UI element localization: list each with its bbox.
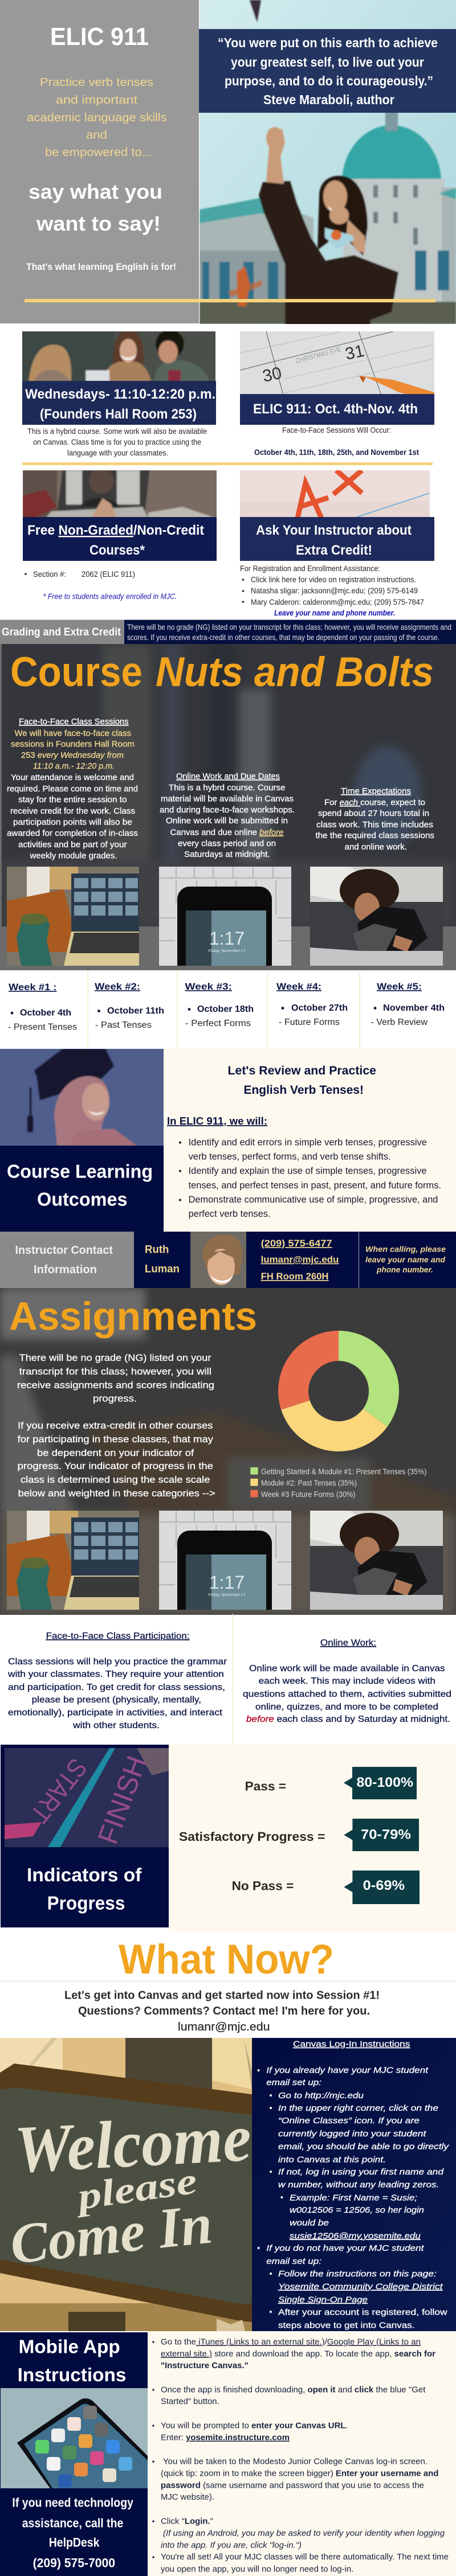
- column: face-to-face class sessions: participation points will also be: [13, 818, 132, 827]
- column: face-to-face class sessions: activities and be part of your: [18, 840, 127, 850]
- list: outcomes: [179, 1137, 441, 1219]
- text block: section number: Section #:: [33, 569, 66, 579]
- column: time expectations: For each course, expect to: [324, 798, 425, 807]
- photo: calendar and marker: CHRISTMAS EVE: [295, 345, 342, 365]
- text block: registration assistance: For Registration and Enrollment Assistance:: [240, 564, 380, 573]
- column: online work and due dates: and during face-to-face workshops.: [160, 805, 295, 815]
- column: online work: Online Work:: [320, 1638, 376, 1648]
- text block: face-to-face dates: [254, 425, 419, 457]
- text block: practice verb tenses: and important: [56, 94, 138, 106]
- panel: indicators of progress: [1, 1745, 456, 1931]
- text block: technology assistance: assistance, call the: [22, 2516, 123, 2530]
- title: ELIC 911: [50, 23, 149, 51]
- heading: indicators of progress: [27, 1864, 142, 1914]
- photo: red A+ grade: [240, 470, 430, 517]
- list: log-in steps: If you do not have your MJC student: [266, 2243, 424, 2253]
- chart legend: Module #2: Past Tenses (35%): [261, 1478, 357, 1487]
- list: log-in steps: currently logged into your student: [278, 2129, 426, 2139]
- column: online work: each week. This may include videos with: [259, 1676, 435, 1686]
- photo: phone on keyboard: [159, 1511, 291, 1610]
- photo: phone on keyboard: Friday, November 17: [209, 1593, 246, 1597]
- text block: technology assistance: [12, 2495, 134, 2570]
- list: mobile app steps: Enter: yosemite.instructure.com: [161, 2433, 290, 2443]
- panel: free non-graded courses: [23, 469, 217, 601]
- photo: start finish line on asphalt: START: [25, 1753, 93, 1829]
- list: mobile app steps: you open the app, you will no longer need to log-in.: [161, 2565, 353, 2574]
- list: mobile app steps: You will be prompted to enter your Canvas URL.: [161, 2421, 348, 2430]
- title: Assignments: [9, 1294, 257, 1339]
- list: log-in steps: [258, 2066, 450, 2330]
- list: mobile app steps: Started" button.: [161, 2397, 219, 2406]
- photo: phone on keyboard: Friday, November 17: [209, 949, 246, 953]
- list: outcomes: tenses, and perfect tenses in past, present, and future forms.: [189, 1180, 441, 1191]
- column: online work: [243, 1638, 451, 1724]
- photo: phone on keyboard: 1:17: [209, 928, 245, 949]
- text block: registration assistance: Natasha sligar: jacksonn@mjc.edu; (209) 575-6149: [251, 586, 418, 595]
- row: no pass: [232, 1871, 420, 1904]
- panel: participation and online work: [0, 1614, 456, 1747]
- column: face-to-face class participation: with other students.: [72, 1721, 160, 1730]
- photo: graduate in front of domed building: [199, 0, 456, 324]
- heading: review and practice: Let's Review and Practice: [228, 1064, 376, 1077]
- text block: registration assistance: Click link here for video on registration instructions.: [251, 575, 416, 584]
- week 2: [95, 981, 164, 1030]
- chart legend: Getting Started & Module #1: Present Tenses (35%): [261, 1467, 426, 1476]
- list: log-in steps: Single Sign-On Page: [278, 2295, 368, 2305]
- text block: contact: Questions? Comments? Contact me! I'm here for you.: [78, 2005, 370, 2017]
- list: outcomes: Identify and explain the use of simple tenses, progressive: [189, 1165, 426, 1176]
- text block: section number: 2062 (ELIC 911): [82, 569, 135, 579]
- column: face-to-face class sessions: We will have face-to-face class: [15, 729, 131, 738]
- background photo: bolts: [2, 644, 456, 926]
- column: online work and due dates: Online Work and Due Dates: [176, 772, 280, 781]
- text block: section number: [25, 569, 177, 601]
- panel: extra credit: [240, 470, 434, 617]
- heading: extra credit: Ask Your Instructor about: [256, 523, 412, 538]
- week 2: Week #2:: [95, 981, 140, 992]
- column: online work: Online work will be made available in Canvas: [249, 1664, 445, 1673]
- text block: grade explanation: be dependent on your indicator of: [37, 1447, 194, 1458]
- list: mobile app steps: Click "Login.": [161, 2516, 213, 2526]
- row: satisfactory progress: Satisfactory Progress =: [179, 1830, 325, 1844]
- title: Nuts and Bolts: [156, 649, 434, 695]
- list: log-in steps: w number, without any leading zeros.: [278, 2180, 439, 2189]
- list: log-in steps: email, you should be able to go directly: [278, 2142, 450, 2151]
- column: online work and due dates: material will be available in Canvas: [161, 794, 294, 804]
- contact details: FH Room 260H: [261, 1271, 328, 1282]
- banner: grading and extra credit: [0, 620, 456, 644]
- photo: phone on keyboard: [159, 867, 291, 966]
- list: log-in steps: If you already have your MJC student: [266, 2066, 429, 2075]
- list: log-in steps: susie12506@my.yosemite.edu: [290, 2231, 421, 2241]
- list: mobile app steps: Once the app is finished downloading, open it and click the blue "Get: [161, 2385, 426, 2394]
- note: when calling: leave your name and: [365, 1255, 445, 1264]
- text block: practice verb tenses: academic language skills: [27, 112, 167, 124]
- contact details: [261, 1238, 339, 1282]
- list: log-in steps: steps above to get into Canvas.: [278, 2320, 415, 2330]
- panel: assignments: [0, 1288, 456, 1622]
- photo: phone on keyboard: 1:17: [209, 1572, 245, 1593]
- week 3: Week #3:: [185, 981, 232, 992]
- column: online work and due dates: every class period and on: [178, 839, 276, 848]
- week 3: - Perfect Forms: [185, 1019, 251, 1028]
- week 4: Week #4:: [276, 981, 321, 992]
- week 5: Week #5:: [377, 981, 422, 992]
- heading: class time: (Founders Hall Room 253): [40, 407, 197, 422]
- photo: welcome please come in chalkboard: [0, 2038, 253, 2331]
- list: mobile app steps: (If using an Android, you may be asked to verify your identity when logging: [163, 2528, 445, 2538]
- photo: video meeting on laptop with mug: [7, 867, 139, 966]
- heading: free non-graded courses: Free Non-Graded/Non-Credit: [27, 523, 204, 538]
- heading: [15, 1244, 113, 1276]
- title: What Now?: [119, 1937, 334, 1983]
- photo: video call on laptop: [23, 470, 217, 517]
- list: mobile app steps: "Instructure Canvas.": [161, 2361, 249, 2370]
- column: face-to-face class sessions: stay for the entire session to: [18, 795, 127, 805]
- photo: welcome please come in chalkboard: Come In: [7, 2192, 215, 2276]
- column: face-to-face class sessions: Your attendance is welcome and: [11, 773, 134, 782]
- title: Course: [10, 649, 142, 695]
- text block: grade explanation: There will be no grade (NG) listed on your: [19, 1352, 211, 1363]
- heading: review and practice: [228, 1064, 376, 1097]
- note: when calling: When calling, please: [365, 1245, 446, 1254]
- panel: course learning outcomes: [0, 1048, 456, 1232]
- background photo: desk and laptop: [0, 1288, 456, 1615]
- row: pass: Pass =: [245, 1779, 286, 1794]
- list: log-in steps: email set up:: [266, 2078, 321, 2087]
- heading: class time: Wednesdays- 11:10-12:20 p.m.: [25, 387, 215, 402]
- heading: say what you want to say: say what you: [28, 180, 162, 203]
- week 2: - Past Tenses: [95, 1020, 152, 1030]
- week 4: [276, 981, 348, 1027]
- panel: class time: [22, 330, 216, 457]
- list: mobile app steps: MJC website).: [161, 2492, 214, 2502]
- photo: welcome please come in chalkboard: please: [72, 2160, 199, 2218]
- week 1: October 4th: [20, 1008, 71, 1018]
- text block: contact: Let's get into Canvas and get started now into Session #1!: [64, 1989, 380, 2001]
- chart legend: [250, 1467, 426, 1499]
- column: face-to-face class sessions: 253 every Wednesday from: [21, 750, 124, 760]
- panel: quote: [199, 29, 456, 113]
- text block: hybrid course: language with your classmates.: [67, 448, 168, 457]
- column: face-to-face class participation: with your classmates. They require your attention: [7, 1670, 224, 1679]
- photo: graduate in hijab: [0, 1049, 164, 1146]
- text block: practice verb tenses: and: [86, 129, 107, 141]
- photo: video meeting on laptop with mug: [7, 1511, 139, 1610]
- heading: course learning outcomes: [7, 1161, 153, 1209]
- subheading: In ELIC 911, we will:: [167, 1115, 267, 1127]
- list: mobile app steps: into the app. If you are, click "log-in."): [161, 2540, 302, 2550]
- week 2: October 11th: [107, 1006, 164, 1016]
- column: online work: online, quizzes, and more to be completed: [255, 1703, 438, 1712]
- list: log-in steps: “Online Classes” icon. If you are: [278, 2116, 420, 2126]
- panel: quote: “You were put on this earth to achieve: [218, 35, 438, 50]
- week 5: November 4th: [383, 1003, 445, 1013]
- text block: grade explanation: for participating in these classes, that may: [18, 1434, 214, 1445]
- column: online work: questions attached to them, activities submitted: [243, 1689, 451, 1699]
- text block: practice verb tenses: [27, 76, 167, 159]
- list: log-in steps: email set up:: [266, 2257, 321, 2266]
- column: face-to-face class sessions: weekly module grades.: [30, 851, 117, 861]
- week 3: October 18th: [197, 1004, 254, 1014]
- week 4: October 27th: [291, 1003, 348, 1013]
- list: log-in steps: into Canvas at this point.: [278, 2155, 386, 2164]
- heading: Instructor Contact: [15, 1244, 113, 1257]
- photo: woman reading on sofa: [310, 1511, 443, 1610]
- column: online work and due dates: Online work will be submitted in: [166, 816, 288, 826]
- list: log-in steps: w0012506 = 12506, so her login: [290, 2205, 424, 2215]
- list: outcomes: Identify and edit errors in simple verb tenses, progressive: [189, 1137, 427, 1147]
- column: face-to-face class sessions: Face-to-Face Class Sessions: [19, 717, 129, 727]
- note: when calling: [365, 1245, 446, 1274]
- list: outcomes: Demonstrate communicative use of simple, progressive, and: [189, 1194, 438, 1205]
- column: time expectations: Time Expectations: [341, 786, 411, 796]
- text block: grade explanation: transcript for this class; however, you will: [19, 1366, 211, 1377]
- photo: woman reading on sofa: [310, 867, 443, 966]
- heading: class time: [25, 387, 215, 422]
- column: face-to-face class participation: Class sessions will help you practice the grammar: [8, 1657, 227, 1667]
- row: satisfactory progress: [179, 1819, 419, 1851]
- panel: mobile app instructions: [0, 2331, 456, 2576]
- text block: technology assistance: (209) 575-7000: [33, 2556, 115, 2570]
- text block: grade explanation: class is determined using the scale scale: [21, 1474, 210, 1485]
- text block: section number: * Free to students already enrolled in MJC.: [43, 592, 177, 601]
- heading: indicators of progress: Indicators of: [27, 1864, 142, 1885]
- column: face-to-face class participation: please be present (physically, mentally,: [32, 1695, 201, 1705]
- heading: Mobile App: [19, 2336, 120, 2357]
- text block: grade explanation: [17, 1352, 215, 1499]
- panel: what now: [0, 1931, 456, 2038]
- chart: donut of grade weights: [278, 1331, 399, 1451]
- column: online work and due dates: Saturdays at midnight.: [184, 850, 270, 859]
- chart legend: Week #3 Future Forms (30%): [261, 1490, 356, 1499]
- text block: technology assistance: If you need technology: [12, 2495, 134, 2509]
- text block: face-to-face dates: October 4th, 11th, 18th, 25th, and November 1st: [254, 448, 419, 457]
- contact details: lumanr@mjc.edu: [261, 1254, 339, 1265]
- text block: grade explanation: progress.: [93, 1393, 137, 1404]
- column: time expectations: class work. This time includes: [316, 820, 433, 830]
- column: face-to-face class participation: emotionally), participate in activities, and interact: [8, 1708, 223, 1717]
- heading: say what you want to say: want to say!: [36, 212, 161, 235]
- list: outcomes: verb tenses, perfect forms, and verb tense shifts.: [189, 1151, 391, 1162]
- list: mobile app steps: (quick tip: zoom in to make the screen bigger) Enter your username and: [161, 2469, 438, 2478]
- heading: extra credit: [256, 523, 412, 558]
- list: mobile app steps: [152, 2337, 449, 2574]
- text block: hybrid course: This is a hybrid course. Some work will also be available: [27, 426, 207, 436]
- column: face-to-face class participation: and participation. To get credit for class sessions,: [8, 1683, 225, 1692]
- column: face-to-face class sessions: required. Please come on time and: [7, 784, 138, 794]
- photo: calendar and marker: [240, 331, 434, 394]
- text block: face-to-face dates: Face-to-Face Sessions Will Occur:: [282, 425, 391, 434]
- text block: contact: lumanr@mjc.edu: [178, 2021, 270, 2033]
- row: no pass: 0-69%: [363, 1878, 405, 1893]
- heading: course learning outcomes: Outcomes: [37, 1189, 128, 1209]
- text block: grade explanation: below and weighted in these categories -->: [18, 1488, 215, 1499]
- heading: free non-graded courses: Courses*: [89, 543, 145, 558]
- heading: Canvas Log-In Instructions: [293, 2040, 410, 2049]
- column: face-to-face class sessions: sessions in Founders Hall Room: [11, 739, 135, 749]
- column: online work: before each class and by Saturday at midnight.: [246, 1714, 450, 1724]
- text block: hybrid course: [27, 426, 207, 457]
- text block: grade explanation: If you receive extra-credit in other courses: [18, 1420, 213, 1431]
- photo: instructor portrait: [190, 1232, 246, 1288]
- panel: course dates: [240, 331, 434, 457]
- panel: weekly schedule: [0, 970, 456, 1051]
- list: log-in steps: would be: [290, 2218, 329, 2228]
- column: face-to-face class participation: Face-to-Face Class Participation:: [46, 1631, 190, 1641]
- panel: hero intro: [0, 0, 199, 323]
- text block: grade explanation: receive assignments and scores indicating: [17, 1380, 214, 1390]
- panel: course nuts and bolts: [0, 644, 456, 978]
- heading: indicators of progress: Progress: [47, 1893, 125, 1914]
- instructor name: Luman: [145, 1264, 180, 1275]
- heading: Information: [34, 1264, 97, 1276]
- column: time expectations: spend about 27 hours total in: [318, 809, 429, 818]
- week 3: [185, 981, 254, 1028]
- list: mobile app steps: Go to the iTunes (Links to an external site.)/Google Play (Links to an: [161, 2337, 421, 2347]
- column: face-to-face class sessions: 11:10 a.m.- 12:20 p.m.: [33, 761, 115, 771]
- panel: quote: Steve Maraboli, author: [263, 92, 394, 107]
- heading: extra credit: Extra Credit!: [296, 543, 372, 558]
- list: log-in steps: Follow the instructions on this page:: [278, 2269, 437, 2279]
- photo: calendar and marker: 30: [261, 364, 283, 386]
- week 5: - Verb Review: [370, 1018, 428, 1027]
- column: time expectations: and online work.: [345, 842, 407, 852]
- list: log-in steps: Example: First Name = Susie;: [290, 2193, 417, 2202]
- heading: course learning outcomes: Course Learning: [7, 1161, 153, 1182]
- text block: registration assistance: Mary Calderon: calderonm@mjc.edu; (209) 575-7847: [251, 597, 424, 606]
- panel: quote: purpose, and to do it courageously.”: [225, 73, 433, 88]
- banner: grading and extra credit: Grading and Extra Credit: [2, 626, 121, 638]
- row: pass: 80-100%: [357, 1775, 413, 1790]
- heading: say what you want to say: [28, 180, 162, 235]
- column: online work and due dates: [160, 772, 295, 859]
- panel: instructor contact information: [0, 1232, 456, 1288]
- instructor name: [145, 1244, 180, 1275]
- heading: [18, 2336, 126, 2385]
- panel: quote: your greatest self, to live out your: [231, 55, 424, 69]
- contact details: (209) 575-6477: [261, 1238, 332, 1249]
- column: time expectations: [316, 786, 434, 852]
- heading: Instructions: [18, 2364, 126, 2385]
- text block: registration assistance: Leave your name and phone number.: [274, 608, 395, 617]
- list: log-in steps: In the upper right corner, click on the: [278, 2103, 438, 2113]
- text block: hybrid course: on Canvas. Class time is for you to practice using the: [33, 437, 201, 446]
- text block: practice verb tenses: Practice verb tenses: [40, 76, 153, 89]
- list: outcomes: perfect verb tenses.: [189, 1208, 270, 1219]
- list: mobile app steps: external site.) store and download the app. To locate the app, search for: [161, 2349, 435, 2358]
- text block: technology assistance: HelpDesk: [49, 2536, 100, 2550]
- column: online work and due dates: This is a hybrd course. Course: [169, 783, 285, 793]
- photo: smartphone with app icons: [1, 2388, 148, 2488]
- week 1: - Present Tenses: [8, 1023, 77, 1032]
- list: log-in steps: Yosemite Community College District: [278, 2282, 443, 2291]
- list: log-in steps: After your account is registered, follow: [278, 2307, 447, 2317]
- note: when calling: phone number.: [376, 1265, 433, 1274]
- list: log-in steps: Go to http://mjc.edu: [278, 2091, 364, 2101]
- text block: grade explanation: progress. Your indicator of progress in the: [18, 1461, 213, 1471]
- photo: start finish line on asphalt: FINISH: [92, 1751, 153, 1848]
- week 1: Week #1 :: [9, 982, 56, 992]
- column: online work and due dates: Canvas and due online before: [170, 827, 284, 837]
- heading: free non-graded courses: [27, 523, 204, 558]
- column: face-to-face class sessions: [7, 717, 138, 861]
- instructor name: Ruth: [145, 1244, 169, 1256]
- list: mobile app steps: You will be taken to the Modesto Junior College Canvas log-in screen.: [163, 2456, 427, 2466]
- row: no pass: No Pass =: [232, 1879, 294, 1893]
- list: mobile app steps: password (same username and password that you use to access the: [161, 2480, 424, 2490]
- panel: canvas log-in instructions: [252, 2038, 456, 2331]
- heading: review and practice: English Verb Tenses!: [244, 1084, 364, 1097]
- photo: start finish line on asphalt: [5, 1748, 169, 1848]
- text block: registration assistance: [240, 564, 424, 617]
- photo: three students laughing: [22, 331, 215, 381]
- week 4: - Future Forms: [279, 1018, 340, 1027]
- column: time expectations: the the required class sessions: [316, 831, 434, 840]
- text block: contact: [64, 1989, 380, 2033]
- text block: practice verb tenses: be empowered to...: [45, 146, 152, 159]
- tagline: That's what learning English is for!: [26, 261, 176, 272]
- row: pass: [245, 1767, 417, 1799]
- list: mobile app steps: You're all set! All your MJC classes will be there automatically. The next time: [161, 2552, 449, 2562]
- column: face-to-face class sessions: awarded for completion of in-class: [7, 828, 138, 838]
- list: log-in steps: If not, log in using your first name and: [278, 2167, 444, 2177]
- week 5: [370, 981, 445, 1027]
- row: satisfactory progress: 70-79%: [361, 1827, 411, 1843]
- photo: calendar and marker: 31: [344, 342, 366, 364]
- week 1: [8, 982, 77, 1032]
- heading: course dates: ELIC 911: Oct. 4th-Nov. 4th: [253, 401, 418, 417]
- column: face-to-face class sessions: receive credit for the work. Class: [10, 806, 135, 816]
- title: [10, 649, 434, 695]
- column: face-to-face class participation: [7, 1631, 227, 1730]
